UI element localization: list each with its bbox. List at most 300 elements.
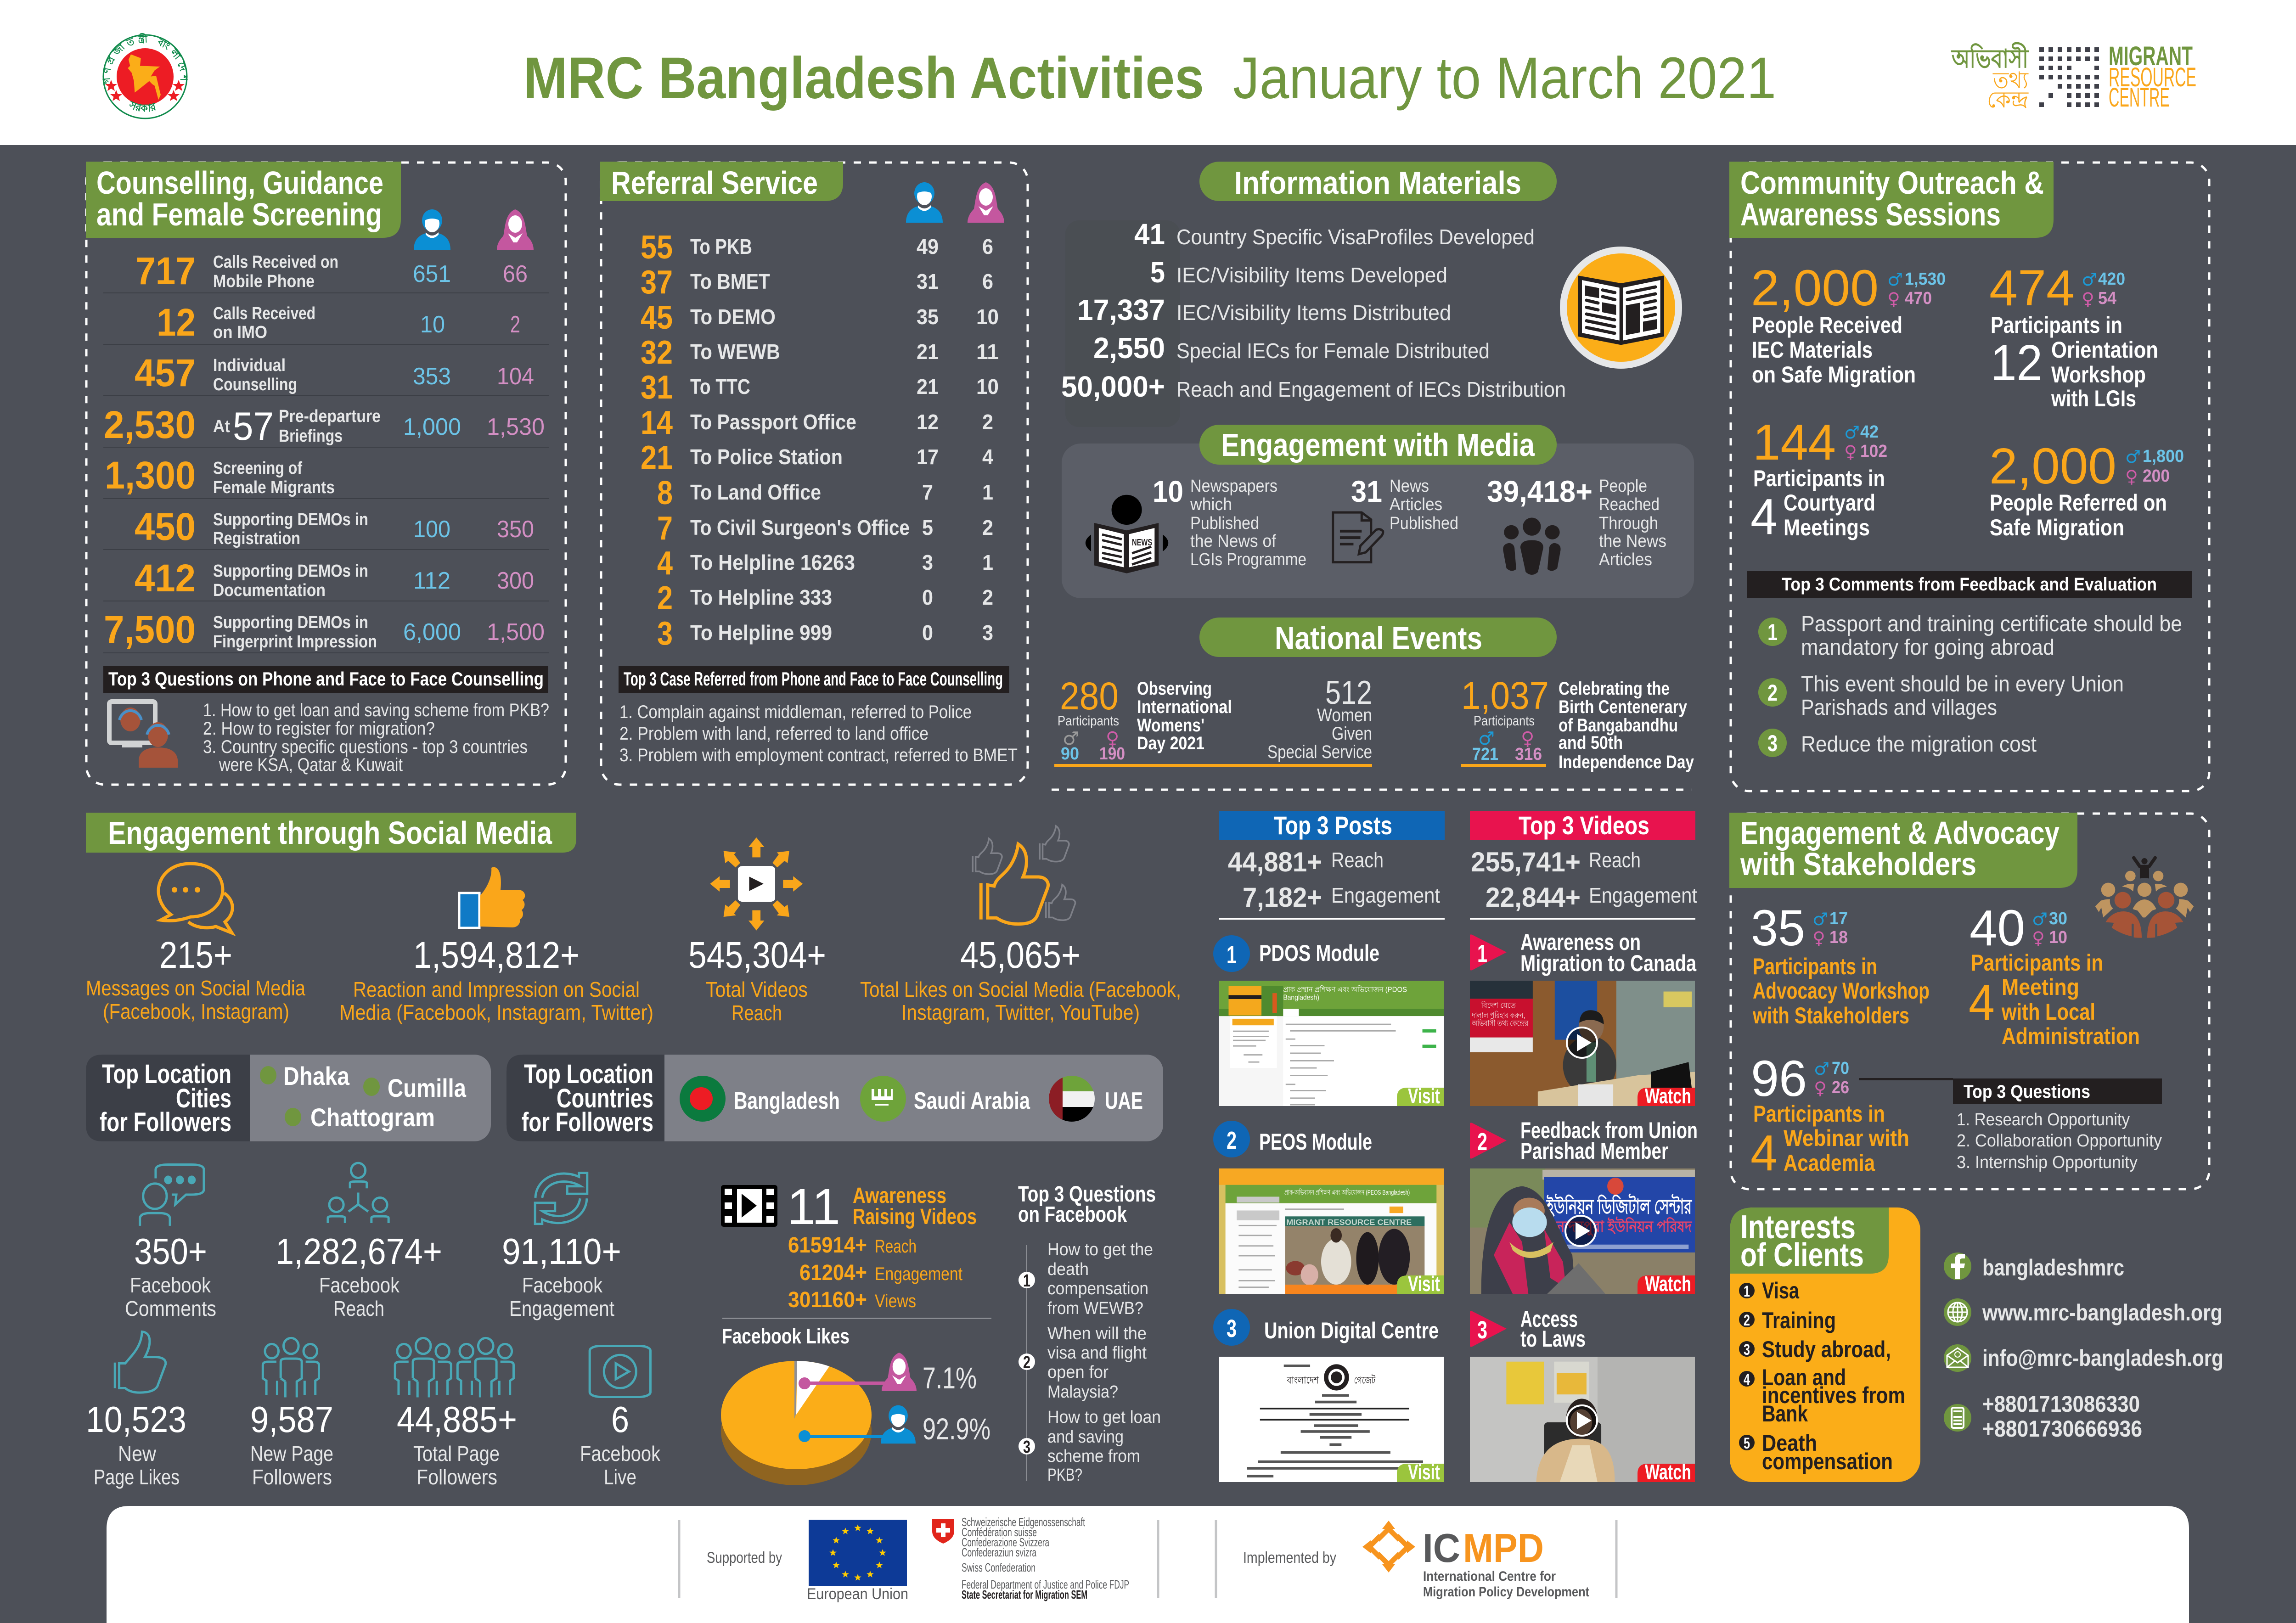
referral table: To WEWB: [690, 340, 780, 364]
logo: Swiss Confederation: [932, 1515, 1129, 1601]
event: international womens day: 280: [1060, 674, 1119, 718]
top 3 questions: Top 3 Questions: [1964, 1082, 2090, 1102]
table rows: Screening of: [213, 459, 302, 478]
referral table: 7: [657, 510, 673, 547]
badge: visit: Visit: [1408, 1272, 1440, 1296]
logo: Swiss Confederation: State Secretariat for Migration SEM: [962, 1588, 1087, 1601]
flag: UAE: [1049, 1076, 1095, 1123]
table rows: 300: [497, 567, 534, 594]
icon: newspaper in circle: [1560, 247, 1682, 369]
heading: Interests: [1740, 1209, 1856, 1246]
list: comments: Parishads and villages: [1801, 696, 1997, 720]
referral table: 31: [917, 270, 939, 293]
list: top 3 cases: 2. Problem with land, referred to land office: [619, 724, 929, 744]
top 3 questions on facebook: PKB?: [1047, 1466, 1082, 1485]
table rows: 412: [135, 556, 196, 600]
thumbnail: gazette document: গেজেট: [1354, 1374, 1376, 1386]
stat: advocacy workshop: Advocacy Workshop: [1753, 978, 1930, 1004]
stat: messages: 215+: [159, 934, 232, 976]
referral table: To Helpline 16263: [690, 550, 855, 574]
referral table: 31: [641, 369, 673, 406]
event: birth centenary: of Bangabandhu: [1559, 715, 1678, 736]
stat: courtyard meetings: ♀: [1844, 442, 1857, 462]
event: international womens day: Special Service: [1267, 742, 1372, 762]
top location countries: UAE: [1105, 1088, 1143, 1114]
list: comments: 3: [1767, 730, 1778, 756]
stat: advocacy workshop: Participants in: [1753, 954, 1877, 979]
thumbnail: PEOS course page: [1219, 1168, 1444, 1294]
stat: advocacy workshop: ♀: [1812, 928, 1825, 948]
facebook stat: new page followers: [250, 1338, 333, 1489]
chart: facebook likes pie: 7.1%: [923, 1361, 977, 1395]
stat: IEC materials: ♂: [1887, 270, 1903, 290]
footer band: [107, 1506, 2189, 1623]
logo: ICMPD: [1362, 1521, 1589, 1600]
heading: Top 3 Posts: [1274, 811, 1392, 840]
heading: [1729, 162, 2054, 238]
logo: ICMPD: MPD: [1463, 1525, 1544, 1571]
event: international womens day: Participants: [1058, 713, 1119, 729]
icon: play button: [1567, 1405, 1597, 1436]
stat: orientation workshop: with LGIs: [2051, 386, 2136, 411]
stat: orientation workshop: 474: [1989, 260, 2075, 316]
video 3: access to laws: to Laws: [1520, 1326, 1586, 1352]
stat: people reached: 39,418+: [1487, 474, 1593, 508]
stat: webinar with academia: 70: [1832, 1059, 1849, 1078]
referral table: To Helpline 999: [690, 621, 832, 645]
stat: total likes: 45,065+: [960, 934, 1080, 976]
awareness raising videos: Views: [875, 1291, 916, 1311]
top location countries: Saudi Arabia: [914, 1088, 1030, 1114]
stat: courtyard meetings: Participants in: [1753, 466, 1885, 491]
top 3 questions on facebook: Malaysia?: [1047, 1382, 1118, 1402]
table rows: Documentation: [213, 581, 326, 600]
stat: webinar with academia: Webinar with: [1784, 1125, 1909, 1151]
facebook stat: new page likes: 10,523: [86, 1399, 186, 1440]
panel: national events: [1052, 618, 1694, 790]
video 3: access to laws: [1470, 1306, 1695, 1484]
table rows: 1,530: [487, 414, 545, 440]
list: comments: This event should be in every Union: [1801, 672, 2124, 696]
top 3 questions: 1. Research Opportunity: [1957, 1110, 2130, 1129]
table rows: Supporting DEMOs in: [213, 562, 368, 581]
stat: orientation workshop: [1989, 260, 2158, 411]
stat: meeting with local administration: 40: [1970, 900, 2025, 956]
referral table: 2: [982, 516, 993, 539]
video 1: awareness on migration to Canada: Migration to Canada: [1520, 950, 1697, 976]
items list: Special IECs for Female Distributed: [1176, 339, 1490, 363]
panel: interests of clients: [1730, 1207, 1920, 1482]
items list: 41: [1134, 218, 1165, 251]
referral table: 21: [641, 439, 673, 476]
heading: of Clients: [1740, 1237, 1864, 1274]
panel: counselling, guidance and female screening: [86, 162, 566, 785]
stat: news articles: [1351, 474, 1458, 533]
logo: ICMPD: IC: [1423, 1525, 1460, 1571]
stat: newspapers: LGIs Programme: [1190, 550, 1306, 569]
facebook stat: engagement: [502, 1173, 621, 1320]
stat: advocacy workshop: 17: [1829, 909, 1848, 928]
top location countries: Bangladesh: [734, 1088, 840, 1114]
icon: person reading news: [1086, 495, 1168, 573]
top 3 questions on facebook: [1018, 1182, 1161, 1485]
metrics: 7,182+: [1243, 882, 1322, 913]
icon: network: [328, 1163, 388, 1223]
stat: courtyard meetings: 4: [1750, 489, 1778, 545]
facebook stat: engagement: Facebook: [522, 1273, 603, 1297]
referral table: 1: [982, 550, 993, 574]
icon: phone: [1944, 1404, 1971, 1432]
referral table: To Civil Surgeon's Office: [690, 516, 910, 539]
facebook stat: live: Facebook: [580, 1442, 661, 1466]
metrics: Engagement: [1589, 883, 1697, 907]
table rows: Pre-departure: [279, 407, 381, 426]
post 1: PDOS module: [1213, 935, 1444, 1108]
black sub-heading bar: Top 3 Comments from Feedback and Evaluation: [1782, 574, 2157, 595]
facebook stat: live: [580, 1346, 661, 1489]
table rows: 2,530: [104, 403, 196, 446]
stat: orientation workshop: 420: [2098, 270, 2125, 289]
stat: IEC materials: 2,000: [1751, 260, 1879, 316]
facebook stat: engagement: 91,110+: [502, 1231, 621, 1272]
awareness raising videos: 61204+: [799, 1261, 867, 1285]
heading: Engagement through Social Media: [108, 815, 552, 851]
thumbnail: PEOS course page: MIGRANT RESOURCE CENTRE: [1286, 1218, 1412, 1227]
referral table: 2: [982, 585, 993, 609]
top location countries: [506, 1055, 1163, 1141]
event: international womens day: Womens': [1137, 715, 1204, 736]
facebook stat: live: 6: [611, 1399, 629, 1440]
chart: facebook likes pie: 92.9%: [923, 1412, 990, 1446]
heading: and Female Screening: [96, 197, 382, 232]
icon: group of three: [263, 1338, 319, 1397]
stat: newspapers: Newspapers: [1190, 477, 1277, 496]
table rows: Calls Received on: [213, 253, 338, 272]
top 3 questions on facebook: visa and flight: [1047, 1343, 1147, 1363]
stat: webinar with academia: 26: [1832, 1078, 1849, 1097]
logo: Swiss Confederation: Confédération suisse: [962, 1525, 1037, 1539]
referral table: To Police Station: [690, 445, 843, 469]
table rows: 651: [413, 261, 451, 287]
heading: [86, 162, 401, 238]
logo: European Union: [807, 1520, 908, 1603]
referral table: 0: [922, 621, 933, 645]
top location cities: [86, 1055, 491, 1141]
facebook stat: reach: [276, 1163, 442, 1320]
table rows: [104, 249, 545, 651]
stat: meeting with local administration: Meeting: [2002, 974, 2079, 1000]
facebook stat: total page followers: [395, 1338, 517, 1489]
facebook stat: total page followers: Followers: [416, 1465, 497, 1489]
items list: IEC/Visibility Items Distributed: [1176, 301, 1451, 325]
referral table: 6: [982, 235, 993, 258]
top 3 questions on facebook: on Facebook: [1018, 1202, 1127, 1227]
table rows: 450: [135, 505, 196, 548]
icon: likes: [973, 826, 1075, 924]
metrics: [1219, 847, 1445, 920]
table rows: Calls Received: [213, 304, 315, 323]
icon: female: [497, 209, 534, 250]
stat: IEC materials: People Received: [1752, 312, 1902, 338]
top 3 questions on facebook: and saving: [1047, 1427, 1124, 1447]
panel: top 3 posts: [1213, 811, 1445, 1484]
facebook stat: new page likes: [86, 1332, 186, 1489]
post 2: PEOS module: 2: [1227, 1127, 1237, 1154]
table rows: 2: [510, 311, 520, 338]
thumbnail: gazette document: বাংলাদেশ: [1287, 1375, 1319, 1386]
implemented by: Implemented by: [1243, 1549, 1336, 1567]
logo: Migrant Resource Centre: তথ্য: [1992, 67, 2029, 93]
icon: document and pen: [1333, 512, 1383, 562]
stat: people reached: People: [1599, 477, 1647, 496]
stat: people referred: 200: [2143, 466, 2170, 486]
stat: meeting with local administration: ♂: [2032, 909, 2048, 929]
stat: messages: Messages on Social Media: [86, 976, 305, 1000]
stat: advocacy workshop: with Stakeholders: [1752, 1003, 1909, 1028]
referral table: 45: [641, 299, 673, 336]
referral table: 2: [982, 410, 993, 434]
facebook stat: reach: 1,282,674+: [276, 1231, 442, 1272]
referral table: 35: [917, 305, 939, 329]
badge: visit: [1397, 1084, 1444, 1108]
table rows: Counselling: [213, 375, 297, 394]
icon: play button: [1565, 1216, 1596, 1246]
event: birth centenary: 316: [1515, 745, 1542, 764]
stat: IEC materials: 470: [1905, 289, 1932, 308]
black sub-heading bar: Top 3 Questions on Phone and Face to Face Counselling: [108, 668, 544, 690]
logo: Migrant Resource Centre: CENTRE: [2109, 83, 2170, 112]
items list: 50,000+: [1061, 370, 1165, 403]
stat: people referred: 1,800: [2143, 447, 2184, 466]
icon: play button: [1567, 1028, 1597, 1058]
top 3 questions on facebook: 2: [1023, 1353, 1030, 1372]
video 1: awareness on migration to Canada: Awareness on: [1520, 929, 1641, 955]
panel: engagement and advocacy with stakeholders: [1729, 813, 2209, 1189]
video 3: access to laws: Access: [1520, 1306, 1578, 1332]
panel: top 3 videos: [1470, 811, 1698, 1484]
badge: visit: Visit: [1408, 1084, 1440, 1108]
top 3 questions: 3. Internship Opportunity: [1957, 1153, 2138, 1172]
icon: person reading news: NEWS: [1132, 538, 1152, 548]
table rows: 57: [233, 404, 274, 449]
referral table: 5: [922, 516, 933, 539]
logo: Migrant Resource Centre: কেন্দ্র: [1987, 87, 2029, 112]
video thumbnail: woman in office: [1470, 1357, 1695, 1482]
facebook stat: comments: 350+: [134, 1231, 207, 1272]
icon: teal thumb: [115, 1332, 166, 1393]
metrics: 22,844+: [1486, 882, 1581, 913]
event: birth centenary: ♀: [1521, 728, 1534, 749]
list of interests: Visa: [1762, 1278, 1800, 1303]
items list: 17,337: [1077, 293, 1165, 326]
top location cities: Cumilla: [388, 1073, 467, 1102]
event: international womens day: Women: [1317, 705, 1372, 725]
stat: total likes: [860, 934, 1181, 1024]
top location cities: Cities: [176, 1084, 231, 1113]
referral table: To Helpline 333: [690, 585, 832, 609]
metrics: Engagement: [1331, 883, 1440, 907]
list of interests: Bank: [1762, 1401, 1808, 1426]
referral table: 4: [982, 445, 993, 469]
post 3: union digital centre: [1213, 1309, 1444, 1484]
top 3 questions on facebook: open for: [1047, 1363, 1109, 1382]
stat: people referred: ♀: [2125, 466, 2138, 487]
stat: people referred: [1989, 438, 2184, 540]
list: comments: mandatory for going abroad: [1801, 635, 2054, 660]
metrics: Reach: [1331, 848, 1384, 872]
awareness raising videos: 11: [787, 1179, 840, 1235]
panel: referral service: [600, 162, 1028, 785]
referral table: To BMET: [690, 270, 770, 293]
heading pill: Information Materials: [1234, 165, 1521, 201]
top location countries: Top Location: [524, 1059, 653, 1089]
stat: total likes: Total Likes on Social Media (Facebook,: [860, 977, 1181, 1001]
badge: visit: Visit: [1408, 1460, 1440, 1484]
stat: people reached: Through: [1599, 514, 1658, 533]
thumbnail: PDOS course page: Bangladesh): [1283, 994, 1319, 1002]
table rows: Mobile Phone: [213, 272, 315, 291]
badge: watch: Watch: [1645, 1272, 1691, 1296]
contact details: +8801730666936: [1982, 1416, 2142, 1442]
referral table: To DEMO: [690, 305, 776, 329]
stat: people reached: [1487, 474, 1666, 569]
referral table: 7: [922, 480, 933, 504]
referral table: To Land Office: [690, 480, 821, 504]
top location countries: Countries: [557, 1084, 653, 1113]
icon: email: [1944, 1344, 1971, 1372]
stat: people referred: ♂: [2125, 447, 2141, 467]
event: international womens day: 512: [1325, 674, 1372, 711]
video 2: feedback from union parishad member: 2: [1477, 1128, 1487, 1156]
stat: advocacy workshop: 35: [1751, 900, 1805, 956]
thumbnail: PDOS course page: [1219, 981, 1444, 1106]
stat: videos reach: Reach: [732, 1001, 782, 1025]
stat: newspapers: which: [1190, 495, 1232, 514]
icon: group of people: [1503, 518, 1561, 575]
facebook stat: new page likes: New: [118, 1442, 157, 1466]
top 3 questions on facebook: How to get the: [1047, 1240, 1153, 1259]
stat: IEC materials: 1,530: [1905, 270, 1946, 289]
table rows: 12: [157, 301, 196, 344]
list: comments: [1758, 612, 2182, 757]
stat: IEC materials: on Safe Migration: [1752, 362, 1916, 387]
event: international womens day: Given: [1332, 724, 1372, 744]
referral table: 10: [976, 375, 999, 399]
table rows: Registration: [213, 529, 300, 548]
event: birth centenary: Celebrating the: [1559, 679, 1670, 699]
icon: reaction thumb: [459, 867, 525, 928]
stat: reaction and impression: Media (Facebook, Instagram, Twitter): [339, 1000, 653, 1024]
referral table: 37: [641, 264, 673, 301]
top 3 questions on facebook: death: [1047, 1260, 1089, 1279]
referral table: 10: [976, 305, 999, 329]
list: comments: 2: [1767, 680, 1778, 706]
facebook stat: new page followers: 9,587: [250, 1399, 333, 1440]
list: top 3 questions: [203, 700, 549, 775]
referral table: 3: [922, 550, 933, 574]
referral table: 3: [982, 621, 993, 645]
stat: courtyard meetings: ♂: [1844, 422, 1860, 443]
facebook stat: engagement: Engagement: [509, 1297, 614, 1320]
event: international womens day: ♂: [1063, 728, 1079, 749]
video 2: feedback from union parishad member: Parishad Member: [1520, 1138, 1668, 1164]
stat: meeting with local administration: 30: [2049, 909, 2067, 928]
referral table: 14: [641, 404, 673, 441]
stat: orientation workshop: Participants in: [1991, 312, 2122, 338]
event: birth centenary: 1,037: [1461, 674, 1549, 717]
stat: IEC materials: ♀: [1887, 289, 1900, 309]
video 2: feedback from union parishad member: Feedback from Union: [1520, 1118, 1698, 1143]
heading: [1219, 811, 1445, 840]
chart: facebook likes pie: [721, 1324, 990, 1485]
top 3 questions on facebook: When will the: [1047, 1324, 1147, 1343]
logo: Swiss Confederation: Confederazione Svizzera: [962, 1535, 1049, 1549]
thumbnail: PDOS course page: প্রাক প্রস্থান প্রশিক্ষণ এবং অভিযোজন (PDOS: [1283, 985, 1407, 994]
facebook stat: new page followers: Followers: [252, 1465, 332, 1489]
list of interests: [1739, 1278, 1905, 1474]
event: international womens day: International: [1137, 697, 1232, 717]
stat: meeting with local administration: Participants in: [1971, 950, 2103, 976]
table rows: 1,500: [487, 619, 545, 646]
heading: [1470, 811, 1695, 840]
stat: newspapers: the News of: [1190, 532, 1276, 551]
items list: Country Specific VisaProfiles Developed: [1176, 225, 1535, 249]
referral table: 49: [917, 235, 939, 258]
table rows: 1,000: [403, 414, 461, 440]
badge: watch: Watch: [1645, 1460, 1691, 1484]
badge: visit: [1397, 1272, 1444, 1296]
list: top 3 questions: were KSA, Qatar & Kuwait: [219, 755, 403, 775]
stat: videos reach: [688, 934, 826, 1025]
metrics: 255,741+: [1471, 847, 1581, 877]
post 1: PDOS module: 1: [1227, 941, 1237, 969]
awareness raising videos: [721, 1179, 991, 1319]
items list: Reach and Engagement of IECs Distribution: [1176, 377, 1566, 401]
logo: European Union: European Union: [807, 1585, 908, 1603]
facebook stat: new page followers: New Page: [250, 1442, 333, 1466]
stat: people referred: People Referred on: [1990, 490, 2167, 516]
table rows: Individual: [213, 356, 286, 375]
title: January to March 2021: [1233, 45, 1776, 111]
stat: total likes: Instagram, Twitter, YouTube): [901, 1000, 1140, 1024]
list of interests: compensation: [1762, 1449, 1893, 1474]
top location cities: Dhaka: [283, 1061, 350, 1090]
icon: female: [968, 182, 1004, 223]
stat: news articles: 31: [1351, 474, 1382, 508]
referral table: 1: [982, 480, 993, 504]
event: birth centenary: and 50th: [1559, 733, 1623, 753]
stat: courtyard meetings: 102: [1860, 442, 1887, 461]
stat: courtyard meetings: [1750, 414, 1887, 545]
referral table: 6: [982, 270, 993, 293]
top 3 questions on facebook: compensation: [1047, 1279, 1148, 1298]
top location cities: for Followers: [100, 1107, 231, 1137]
event: birth centenary: 721: [1472, 745, 1498, 764]
stat: meeting with local administration: Administration: [2002, 1023, 2140, 1049]
stat: orientation workshop: Orientation: [2051, 337, 2158, 363]
stat: courtyard meetings: Meetings: [1784, 515, 1870, 540]
stat: orientation workshop: ♂: [2082, 270, 2097, 290]
table rows: 1,300: [105, 454, 196, 497]
event: international womens day: Day 2021: [1137, 733, 1204, 753]
metrics: 44,881+: [1228, 847, 1322, 877]
video 1: awareness on migration to Canada: 1: [1477, 940, 1487, 967]
icon: facebook: [1944, 1252, 1971, 1280]
supported by: Supported by: [707, 1549, 782, 1567]
stat: people reached: the News: [1599, 532, 1666, 551]
contact details: [1944, 1252, 2223, 1442]
referral table: 12: [917, 410, 939, 434]
